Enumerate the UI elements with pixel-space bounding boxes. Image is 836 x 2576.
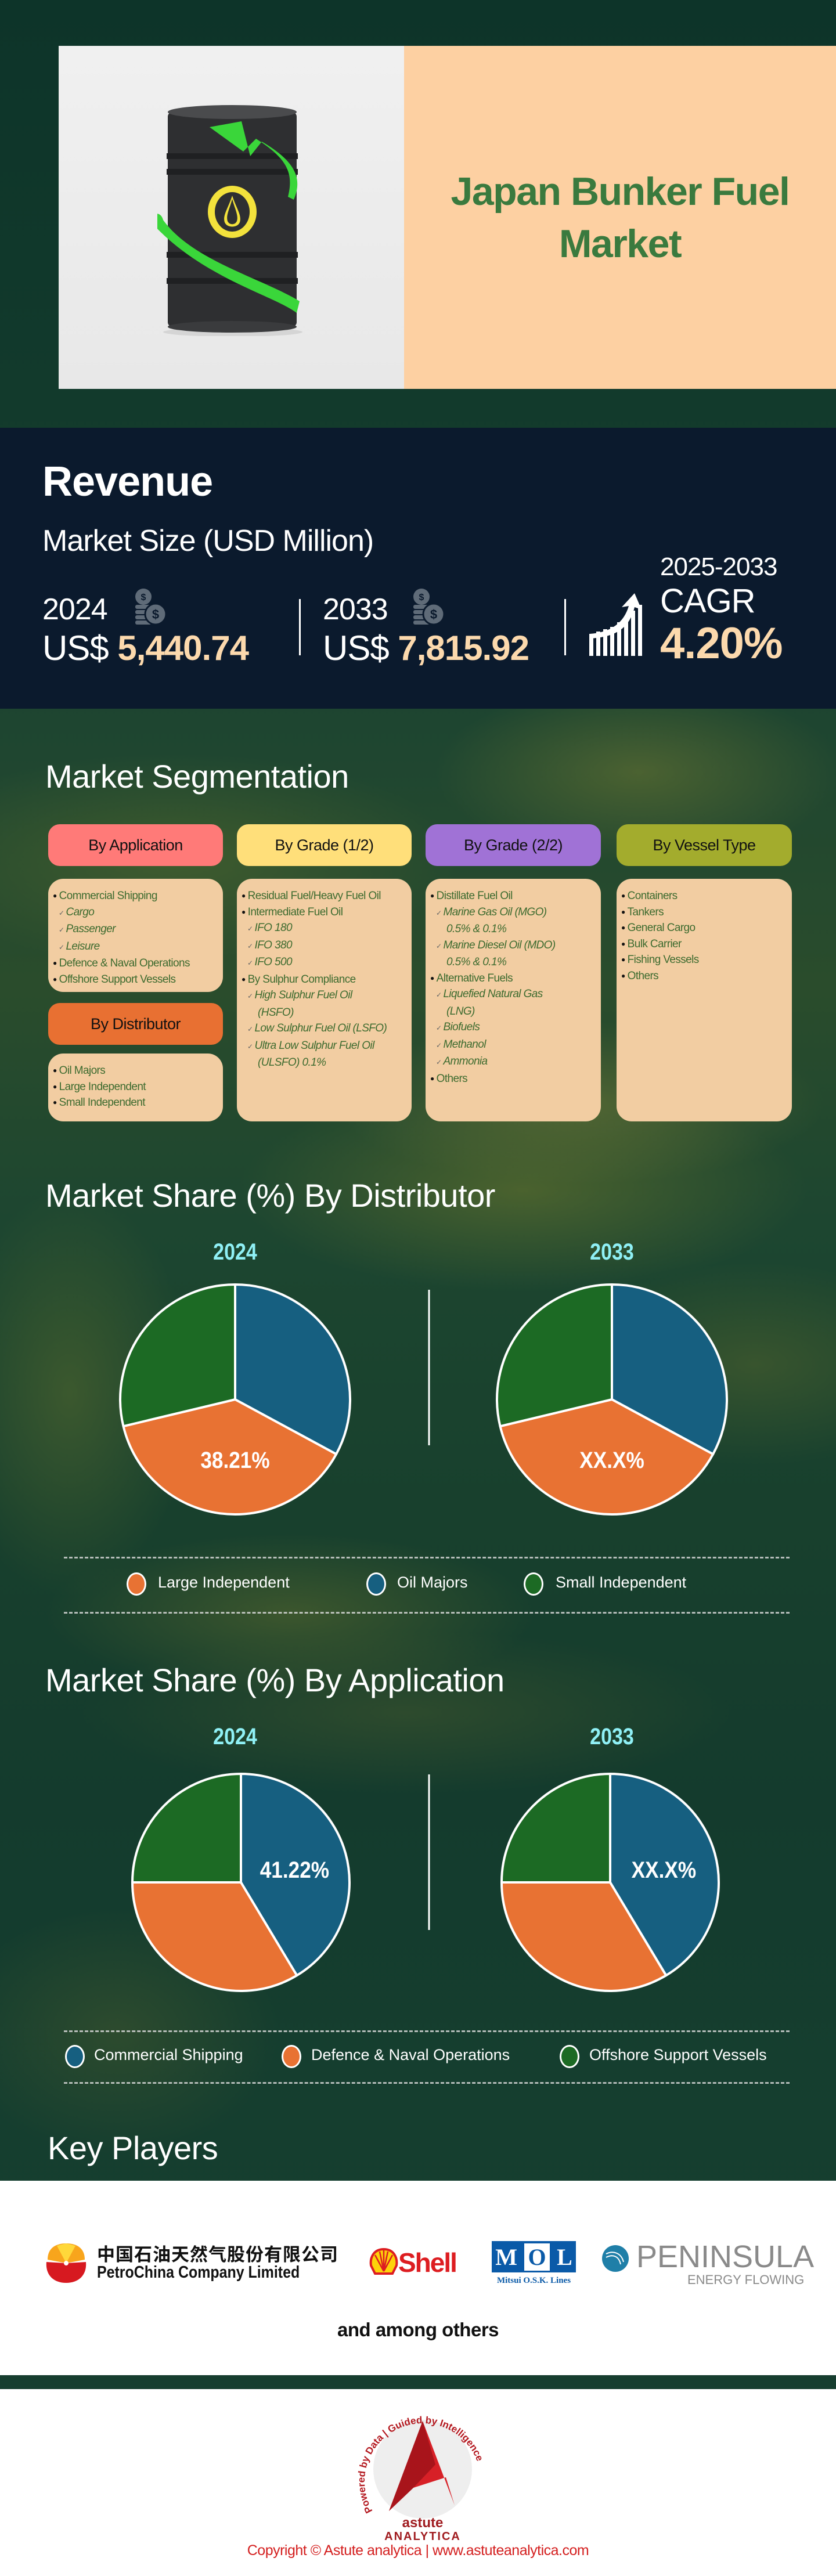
icon: coins: $ [419,593,424,602]
list: application: Leisure [66,940,100,952]
logo: shell: Shell [398,2247,456,2278]
list: grade 1: IFO 180 [254,922,292,934]
list: vessel type: Bulk Carrier [628,938,682,950]
logo: mol: O [528,2244,546,2270]
logo: shell [369,2247,456,2278]
list: grade 1: By Sulphur Compliance [248,973,356,986]
list: vessel type: Tankers [628,905,664,918]
header: by application: By Application [88,836,183,853]
list: grade 1: Residual Fuel/Heavy Fuel Oil [248,890,381,902]
list: grade 1: (HSFO) [258,1006,294,1018]
list: distributor: Small Independent [59,1096,145,1109]
stat 2024: 2024 [42,593,107,626]
label: 2033: 2033 [590,1724,634,1749]
label: 2024: 2024 [213,1724,257,1749]
cagr: 2025-2033 [660,553,777,581]
logo: astute analytica: astute [402,2515,443,2531]
subheading: Market Size (USD Million) [42,524,373,558]
pie 2033 [497,1285,727,1514]
pie 2033: XX.X% [579,1447,644,1473]
icon: coins: $ [430,607,437,622]
logo: peninsula: PENINSULA [636,2239,814,2274]
list: grade 2: Marine Gas Oil (MGO) [443,905,547,918]
header: by distributor: By Distributor [91,1015,181,1032]
list: vessel type [617,879,792,1121]
heading: market share by application: Market Share (%) By Application [45,1662,505,1698]
list: application [48,879,223,992]
icon: coins [413,589,444,625]
header: by grade 2 [426,824,601,866]
stat 2033: US$ 7,815.92 [323,629,529,668]
list: vessel type: General Cargo [628,922,695,934]
footer [0,2389,836,2576]
list: grade 2: 0.5% & 0.1% [446,923,506,935]
list: grade 1: Low Sulphur Fuel Oil (LSFO) [254,1022,387,1034]
list: grade 2: Ammonia [443,1055,488,1067]
text: and among others: and among others [337,2319,499,2340]
heading: key players: Key Players [48,2130,218,2166]
list: grade 2: (LNG) [446,1005,475,1017]
legend: distributor: Oil Majors [397,1574,468,1591]
logo: petrochina: 中国石油天然气股份有限公司 [97,2245,338,2265]
cagr [660,553,783,668]
revenue panel [0,428,836,709]
list: grade 1: (ULSFO) 0.1% [258,1056,326,1069]
panel: key players [0,2181,836,2375]
pie 2024: 38.21% [200,1447,270,1473]
logo: petrochina: PetroChina Company Limited [97,2263,300,2282]
logo: astute analytica: Powered by Data | Guided by Intelligence [358,2416,482,2513]
header: by grade 1: By Grade (1/2) [275,836,374,853]
title: Market [559,222,681,266]
list: application: Offshore Support Vessels [59,973,175,986]
title [404,46,836,389]
stat 2033 [323,589,529,668]
header: by grade 2: By Grade (2/2) [464,836,563,853]
logo: mol [492,2241,576,2285]
list: grade 1: IFO 500 [254,956,292,968]
list: grade 1: Ultra Low Sulphur Fuel Oil [254,1039,374,1052]
list: grade 2 [426,879,601,1121]
heading: market share by distributor: Market Share (%) By Distributor [45,1177,495,1214]
pie 2033: XX.X% [632,1857,696,1882]
stat 2024 [42,589,249,668]
icon: coins: $ [141,593,146,602]
icon: coins [135,589,165,625]
panel: segmentation [48,824,792,1121]
legend: distributor [127,1572,686,1596]
legend: application [65,2045,767,2068]
legend: application: Offshore Support Vessels [589,2046,767,2063]
pie 2024: 41.22% [260,1857,329,1882]
label: 2024: 2024 [213,1239,257,1265]
logo: mol: M [495,2244,517,2270]
list: grade 2: Liquefied Natural Gas [443,988,543,1000]
header: by grade 1 [237,824,412,866]
stat 2033: 2033 [323,593,388,626]
list: grade 2: Others [437,1073,467,1084]
title: Japan Bunker Fuel [451,169,789,214]
header panel [59,46,836,389]
header: by vessel type [617,824,792,866]
list: grade 2: Alternative Fuels [437,972,513,984]
list: grade 1: High Sulphur Fuel Oil [254,989,352,1001]
chart: application pies [131,1724,720,1992]
pie 2024 [120,1285,350,1514]
legend: distributor: Large Independent [158,1574,290,1591]
list: application: Passenger [66,923,116,935]
stat 2024: US$ 5,440.74 [42,629,248,668]
list: grade 1 [237,879,412,1121]
legend: application: Commercial Shipping [94,2046,243,2063]
list: distributor: Oil Majors [59,1065,105,1077]
legend: application: Defence & Naval Operations [311,2046,510,2063]
legend: distributor: Small Independent [556,1574,686,1591]
barrel image panel [59,46,404,389]
list: application: Commercial Shipping [59,890,157,902]
list: distributor: Large Independent [59,1081,146,1092]
logo: peninsula [602,2239,814,2287]
logo: mol: Mitsui O.S.K. Lines [497,2276,571,2285]
cagr: CAGR [660,582,755,620]
heading: market segmentation: Market Segmentation [45,758,349,795]
list: grade 2: 0.5% & 0.1% [446,956,506,968]
label: 2033: 2033 [590,1239,634,1265]
pie 2024 [132,1774,349,1991]
heading: revenue: Revenue [42,459,212,505]
logo: mol: L [557,2244,572,2270]
header: by application [48,824,223,866]
logo: peninsula: ENERGY FLOWING [687,2272,804,2287]
list: grade 2: Distillate Fuel Oil [437,890,513,902]
list: grade 2: Marine Diesel Oil (MDO) [443,939,556,951]
list: application: Cargo [66,905,94,918]
list: vessel type: Others [628,969,658,982]
list: grade 2: Biofuels [443,1021,480,1033]
text: copyright: Copyright © Astute analytica | www.astuteanalytica.com [247,2542,589,2559]
icon: coins: $ [152,607,159,622]
list: grade 1: IFO 380 [254,939,292,951]
pie 2033 [502,1774,719,1991]
icon: growth chart [589,593,642,656]
chart: distributor pies [119,1239,728,1516]
list: grade 1: Intermediate Fuel Oil [248,905,343,918]
logo: petrochina [46,2243,338,2283]
list: grade 2: Methanol [443,1038,486,1051]
cagr: 4.20% [660,619,783,668]
header: by vessel type: By Vessel Type [653,836,756,853]
list: distributor [48,1054,223,1121]
list: vessel type: Containers [628,890,678,902]
list: application: Defence & Naval Operations [59,957,190,969]
icon: oil barrel with green arrow [157,105,302,336]
list: vessel type: Fishing Vessels [628,954,699,966]
header: by distributor [48,1003,223,1045]
